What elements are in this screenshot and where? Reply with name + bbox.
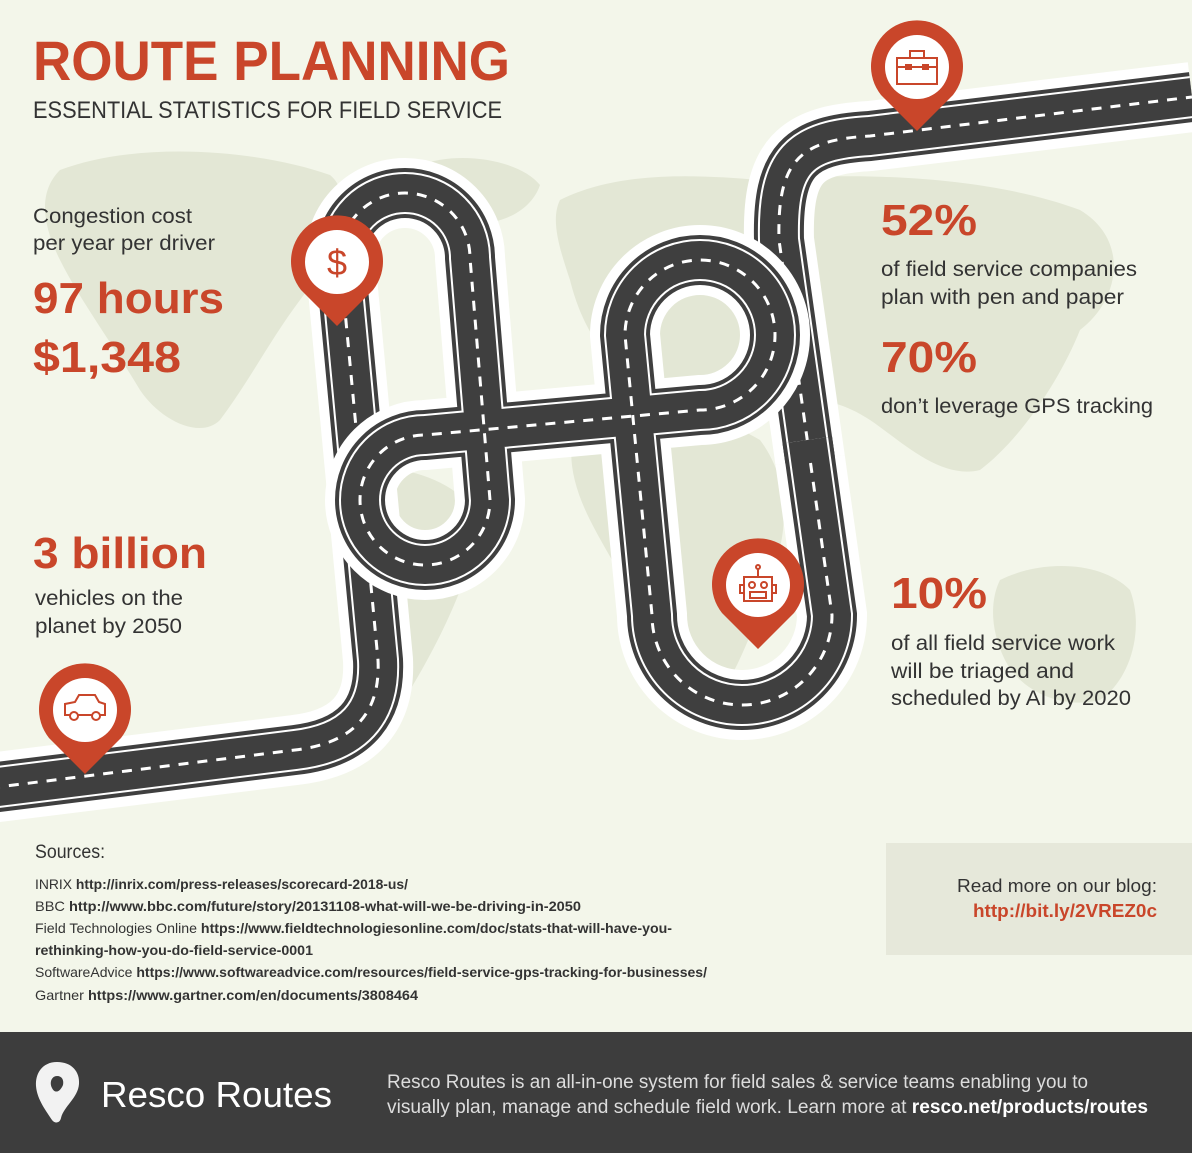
sources: BBC http://www.bbc.com/future/story/20131108-what-will-we-be-driving-in-2050 — [35, 898, 581, 914]
pin: robot — [712, 538, 804, 649]
sources — [35, 842, 707, 1003]
footer: Resco Routes — [101, 1074, 332, 1115]
stat: pen and paper: plan with pen and paper — [881, 286, 1124, 309]
sources: Gartner https://www.gartner.com/en/documents/3808464 — [35, 987, 418, 1003]
stat: GPS: 70% — [881, 333, 977, 382]
stat: vehicles: planet by 2050 — [35, 615, 182, 638]
stat: congestion: per year per driver — [33, 232, 215, 255]
blog box — [886, 843, 1192, 955]
footer: visually plan, manage and schedule field work. Learn more at resco.net/products/routes — [387, 1097, 1148, 1118]
sources: rethinking-how-you-do-field-service-0001 — [35, 942, 313, 958]
stat: pen and paper — [881, 196, 1137, 309]
title: ROUTE PLANNING — [33, 29, 510, 92]
stat: pen and paper: 52% — [881, 196, 977, 245]
stat: AI: scheduled by AI by 2020 — [891, 687, 1131, 710]
pin: dollar — [291, 215, 383, 326]
world map background — [45, 151, 1136, 722]
stat: congestion: 97 hours — [33, 274, 224, 323]
blog box: Read more on our blog: — [957, 876, 1157, 896]
sources: Field Technologies Online https://www.fieldtechnologiesonline.com/doc/stats-that-will-have-you- — [35, 920, 672, 936]
stat: AI — [890, 569, 1131, 710]
stat: AI: of all field service work — [891, 632, 1116, 655]
subtitle: ESSENTIAL STATISTICS FOR FIELD SERVICE — [33, 97, 502, 124]
pin: car — [39, 663, 131, 774]
road — [0, 97, 1192, 788]
stat: congestion: $1,348 — [33, 333, 181, 382]
stat: AI: will be triaged and — [890, 660, 1074, 683]
pin: briefcase — [871, 20, 963, 131]
sources: INRIX http://inrix.com/press-releases/scorecard-2018-us/ — [35, 876, 408, 892]
pin: dollar: $ — [327, 242, 347, 283]
stat: AI: 10% — [891, 569, 987, 618]
blog box: http://bit.ly/2VREZ0c — [973, 901, 1157, 921]
sources: Sources: — [35, 842, 105, 863]
stat: congestion — [33, 205, 224, 382]
stat: congestion: Congestion cost — [33, 205, 192, 228]
sources: SoftwareAdvice https://www.softwareadvice.com/resources/field-service-gps-tracking-for-businesses/ — [35, 964, 707, 980]
icon: logo — [36, 1062, 79, 1122]
stat: GPS: don’t leverage GPS tracking — [881, 395, 1153, 418]
footer: Resco Routes is an all-in-one system for field sales & service teams enabling you to — [387, 1072, 1088, 1093]
stat: vehicles: 3 billion — [33, 529, 207, 578]
stat: vehicles: vehicles on the — [35, 587, 183, 610]
stat: GPS — [881, 333, 1153, 418]
stat: vehicles — [33, 529, 207, 638]
stat: pen and paper: of field service companies — [881, 258, 1137, 281]
footer — [0, 1032, 1192, 1153]
